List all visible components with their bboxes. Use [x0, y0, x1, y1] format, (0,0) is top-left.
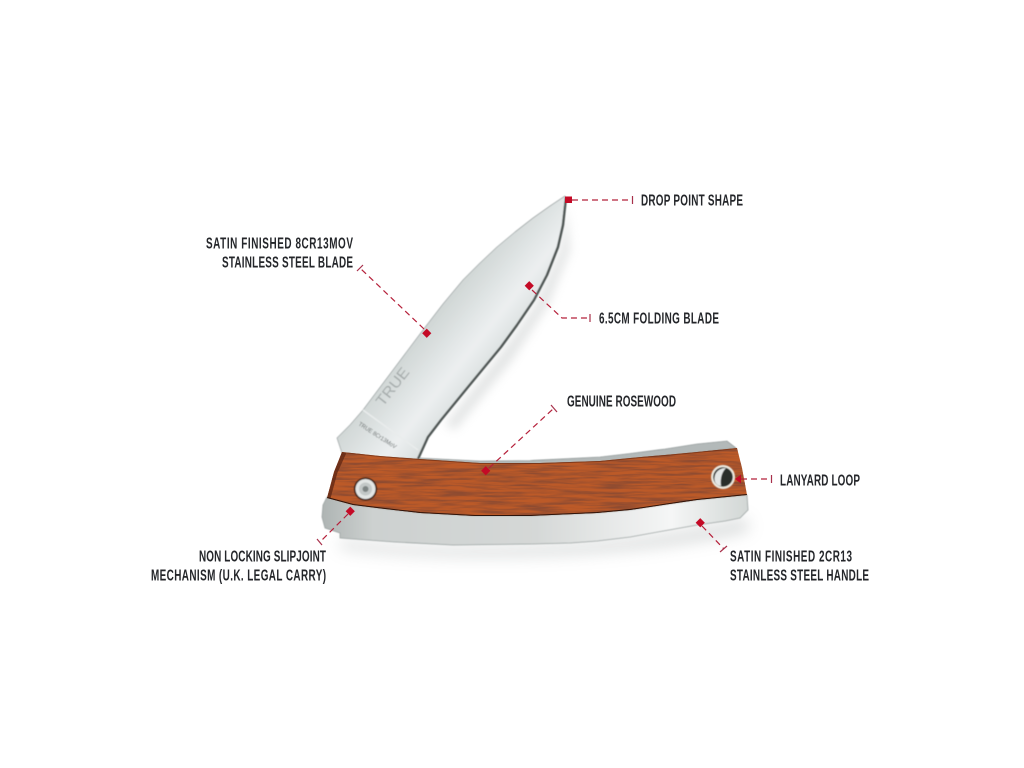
callout: genuine rosewood	[481, 392, 676, 475]
callout: handle steel: STAINLESS STEEL HANDLE	[730, 566, 869, 584]
top steel liner	[420, 441, 736, 464]
pivot screw	[354, 478, 377, 500]
callout: slipjoint mechanism	[151, 507, 355, 584]
callout: genuine rosewood: GENUINE ROSEWOOD	[567, 392, 676, 410]
callout: drop point shape: DROP POINT SHAPE	[641, 191, 743, 209]
callout: folding blade: 6.5CM FOLDING BLADE	[599, 309, 719, 327]
blade logo: TRUE	[373, 364, 413, 409]
knife drop shadow	[340, 205, 750, 556]
callout: lanyard loop	[735, 471, 860, 489]
callout: slipjoint mechanism: NON LOCKING SLIPJOINT	[199, 547, 326, 565]
callout: lanyard loop: LANYARD LOOP	[780, 471, 860, 489]
lanyard hole	[711, 465, 735, 489]
knife feature diagram	[152, 194, 869, 584]
callout: handle steel	[696, 518, 869, 584]
knife photo illustration	[320, 196, 755, 556]
blade steel marking: TRUE 8Cr13MoV	[357, 422, 397, 451]
callout: slipjoint mechanism: MECHANISM (U.K. LEGAL CARRY)	[151, 566, 326, 584]
blade ricasso line	[363, 410, 418, 450]
blade cutting edge	[418, 198, 566, 459]
callout: folding blade	[525, 281, 719, 327]
blade	[337, 196, 566, 459]
callout: blade steel	[206, 234, 431, 338]
rosewood scale	[327, 448, 747, 516]
callout: blade steel: STAINLESS STEEL BLADE	[222, 253, 353, 271]
callout: handle steel: SATIN FINISHED 2CR13	[730, 547, 852, 565]
callout: drop point shape	[565, 191, 743, 209]
steel handle	[322, 495, 748, 545]
callout: blade steel: SATIN FINISHED 8CR13MOV	[206, 234, 353, 252]
